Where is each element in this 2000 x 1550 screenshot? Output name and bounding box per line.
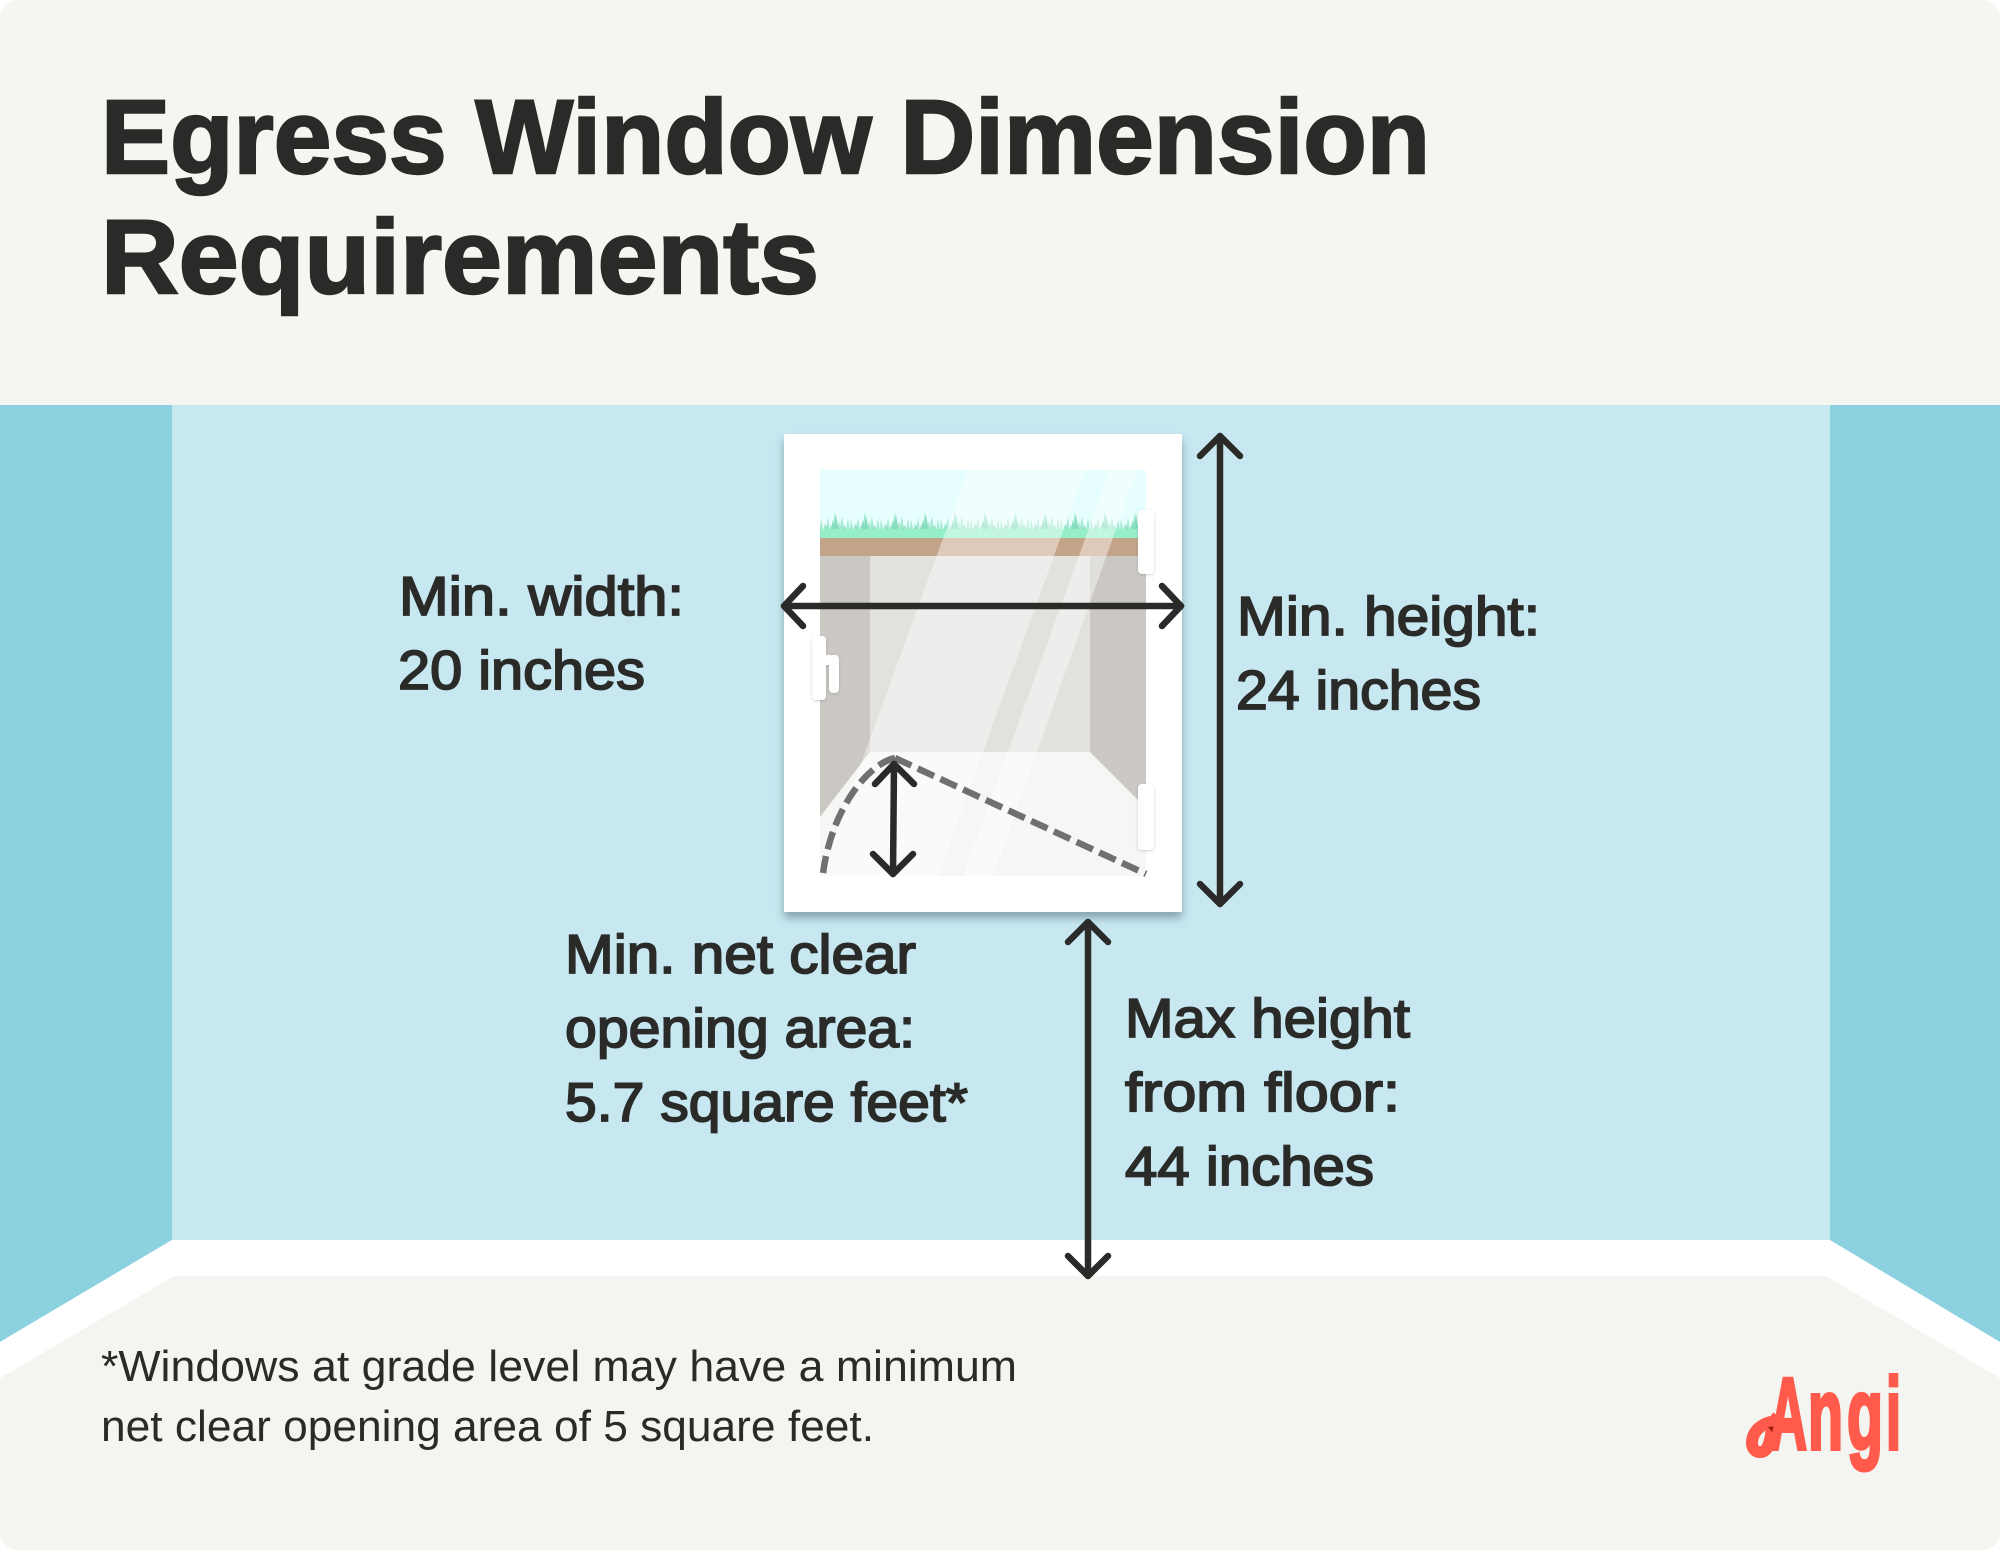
window well side walls <box>820 556 1146 818</box>
soil <box>820 538 1146 556</box>
label: minimum height: Min. height: <box>1237 585 1540 647</box>
logo: Angi <box>1752 1357 1901 1471</box>
arrow: maximum height from floor <box>1068 922 1108 1276</box>
back wall <box>172 405 1830 1240</box>
label: minimum net clear opening area <box>565 923 968 1133</box>
footnote: net clear opening area of 5 square feet. <box>101 1402 874 1451</box>
glass reflection narrow <box>1008 470 1136 752</box>
view through the glass <box>820 470 1146 876</box>
label: maximum height from floor: from floor: <box>1125 1061 1400 1123</box>
header band <box>0 0 2000 405</box>
label: maximum height from floor <box>1125 987 1410 1197</box>
sky <box>820 470 1146 529</box>
label: minimum height <box>1236 585 1540 721</box>
grass base <box>820 529 1138 539</box>
window illustration <box>784 434 1182 912</box>
dashed opening swing line <box>823 758 1146 874</box>
label: maximum height from floor: Max height <box>1125 987 1410 1049</box>
logo wordmark: g <box>1847 1357 1883 1471</box>
title <box>101 79 1430 316</box>
window well floor <box>820 752 1146 876</box>
window handle <box>812 636 839 700</box>
footnote: *Windows at grade level may have a minimum <box>101 1342 1017 1391</box>
arrow: minimum height <box>1200 436 1240 904</box>
label: minimum net clear opening area: 5.7 square feet* <box>565 1071 968 1133</box>
footnote <box>101 1342 1017 1451</box>
window frame <box>784 434 1182 912</box>
label: minimum net clear opening area: opening area: <box>565 997 915 1059</box>
logo loop <box>1752 1416 1782 1452</box>
title: Requirements <box>101 199 819 316</box>
glass reflection wide <box>861 470 1084 764</box>
label: maximum height from floor: 44 inches <box>1125 1135 1374 1197</box>
upper hinge <box>1138 510 1154 574</box>
left side wall <box>0 405 172 1342</box>
logo wordmark: i <box>1886 1357 1901 1471</box>
logo wordmark: n <box>1808 1357 1843 1471</box>
label: minimum width <box>398 565 684 701</box>
window well back wall <box>870 556 1090 752</box>
arrow: net clear opening <box>873 764 914 874</box>
logo wordmark: A <box>1769 1357 1807 1471</box>
title: Egress Window Dimension <box>101 79 1430 196</box>
label: minimum net clear opening area: Min. net clear <box>565 923 916 985</box>
logo loop fold <box>1768 1426 1778 1439</box>
right side wall <box>1830 405 2000 1342</box>
arrow: minimum width <box>784 586 1181 626</box>
baseboard <box>0 1240 2000 1342</box>
label: minimum height: 24 inches <box>1236 659 1481 721</box>
label: minimum width: 20 inches <box>398 639 645 701</box>
grass <box>820 512 1138 529</box>
label: minimum width: Min. width: <box>399 565 684 627</box>
floor <box>0 1276 2000 1550</box>
lower hinge <box>1138 784 1154 850</box>
